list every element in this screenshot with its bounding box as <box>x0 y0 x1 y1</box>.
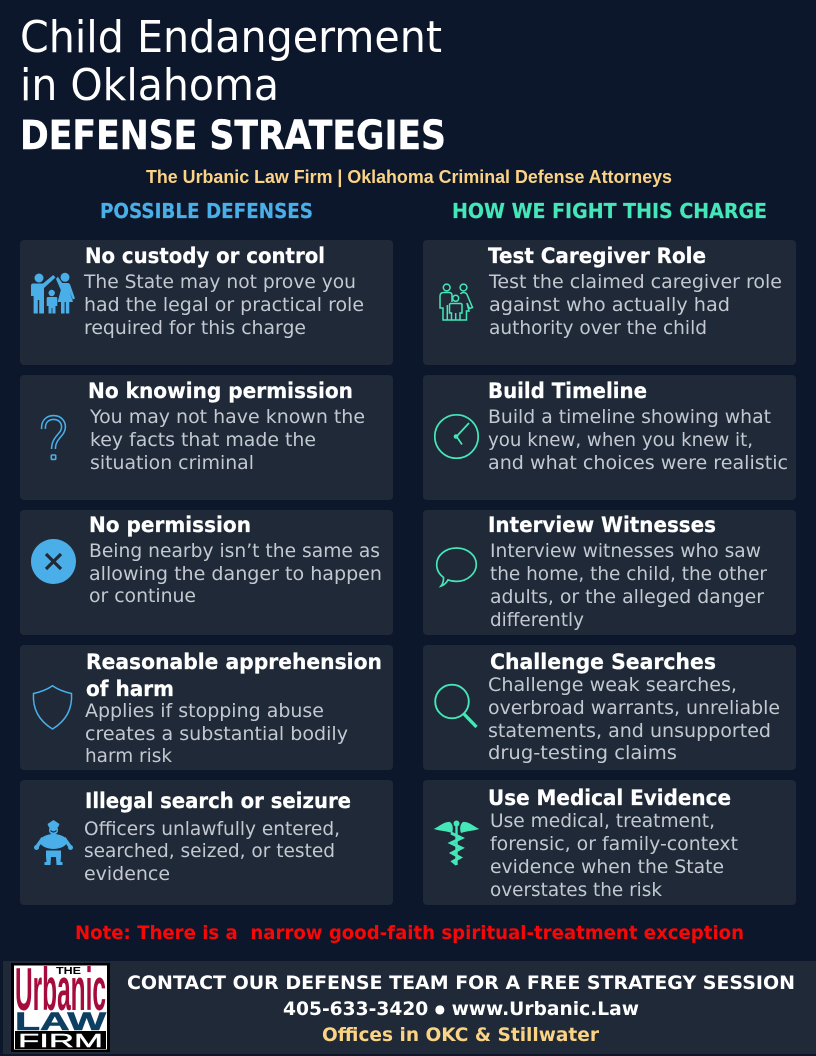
text block: allowing the danger to happen <box>89 564 382 585</box>
heading: No custody or control <box>85 244 325 269</box>
text block: or continue <box>89 586 196 607</box>
subtitle: firm name: The Urbanic Law Firm | Oklahoma Criminal Defense Attorneys <box>146 166 672 187</box>
text block: and what choices were realistic <box>488 453 788 474</box>
logo: THE <box>56 966 81 977</box>
text block <box>488 407 788 474</box>
text block: Build a timeline showing what <box>488 407 771 428</box>
text block: had the legal or practical role <box>84 295 364 316</box>
title: DEFENSE STRATEGIES <box>20 113 446 159</box>
text block: evidence <box>84 864 170 885</box>
text block: harm risk <box>85 746 172 767</box>
heading: how we fight this charge: HOW WE FIGHT THIS CHARGE <box>452 199 767 223</box>
text block: Test the claimed caregiver role <box>488 272 782 293</box>
panel: build timeline <box>423 375 796 500</box>
panel: interview witnesses <box>423 510 796 635</box>
text block <box>89 407 365 474</box>
panel: illegal search or seizure <box>20 780 393 905</box>
title <box>20 12 446 159</box>
text block: The State may not prove you <box>83 272 356 293</box>
text block: differently <box>490 610 584 631</box>
heading: Challenge Searches <box>490 650 716 675</box>
text block: Applies if stopping abuse <box>85 701 324 722</box>
text block: overstates the risk <box>490 880 662 901</box>
panel: no custody or control <box>20 240 393 365</box>
phone and website: www.Urbanic.Law <box>445 998 639 1020</box>
logo: FIRM <box>18 1030 103 1051</box>
text block: Being nearby isn’t the same as <box>89 541 380 562</box>
icon: caduceus <box>434 820 479 865</box>
heading: Test Caregiver Role <box>488 244 706 269</box>
offices: Offices in OKC & Stillwater <box>322 1024 600 1046</box>
heading: Reasonable apprehension <box>86 650 382 675</box>
icon: x in circle <box>31 539 76 584</box>
text block: the home, the child, the other <box>490 564 767 585</box>
text block: You may not have known the <box>89 407 365 428</box>
text block <box>85 701 348 767</box>
heading: Use Medical Evidence <box>488 786 731 811</box>
text block: against who actually had <box>489 295 730 316</box>
icon: clock <box>435 415 478 458</box>
panel: use medical evidence <box>423 780 796 905</box>
text block <box>490 541 767 631</box>
phone and website: ● <box>435 1002 445 1016</box>
text block: forensic, or family-context <box>490 834 738 855</box>
text block: required for this charge <box>84 318 306 339</box>
text block: situation criminal <box>90 453 254 474</box>
text block: Use medical, treatment, <box>490 811 715 832</box>
logo <box>11 956 110 1052</box>
text block: you knew, when you knew it, <box>488 430 753 451</box>
panel: no permission <box>20 510 393 635</box>
panel: reasonable apprehension of harm <box>20 645 393 770</box>
logo: LAW <box>15 1008 107 1036</box>
text block: key facts that made the <box>90 430 316 451</box>
text block: evidence when the State <box>490 857 724 878</box>
text block: creates a substantial bodily <box>85 724 348 745</box>
text block: drug-testing claims <box>488 743 677 764</box>
text block <box>89 541 382 607</box>
icon: police officer <box>34 820 73 865</box>
text block <box>490 811 738 901</box>
contact heading: CONTACT OUR DEFENSE TEAM FOR A FREE STRATEGY SESSION <box>127 972 795 994</box>
heading <box>86 650 382 702</box>
text block <box>488 272 782 339</box>
icon: family outline <box>440 284 472 320</box>
text block: searched, seized, or tested <box>84 841 335 862</box>
footer banner <box>3 956 816 1054</box>
text block: adults, or the alleged danger <box>490 587 764 608</box>
icon: question mark <box>43 418 64 459</box>
footer banner: Urbanic <box>15 956 106 1023</box>
icon: magnifying glass <box>435 685 476 727</box>
heading: of harm <box>86 677 174 702</box>
text block: statements, and unsupported <box>488 721 771 742</box>
panel: test caregiver role <box>423 240 796 365</box>
heading: No knowing permission <box>88 379 353 404</box>
text block: Officers unlawfully entered, <box>84 819 340 840</box>
heading: Interview Witnesses <box>488 513 716 538</box>
heading: No permission <box>89 513 251 538</box>
heading: Build Timeline <box>488 379 647 404</box>
title: in Oklahoma <box>20 60 279 111</box>
text block <box>488 675 780 764</box>
icon: family with raised arms <box>31 273 75 314</box>
panel: challenge searches <box>423 645 796 770</box>
text block: Interview witnesses who saw <box>490 541 761 562</box>
text block: Challenge weak searches, <box>488 675 737 696</box>
text block <box>83 272 364 339</box>
title: Child Endangerment <box>20 12 442 63</box>
phone and website: 405-633-3420 <box>283 998 431 1020</box>
note: Note: There is a narrow good-faith spiritual-treatment exception <box>75 922 744 944</box>
icon: shield <box>33 686 72 729</box>
text block: overbroad warrants, unreliable <box>488 698 780 719</box>
heading: Illegal search or seizure <box>85 789 351 814</box>
text block: authority over the child <box>489 318 707 339</box>
icon: speech bubble <box>437 548 476 586</box>
heading: possible defenses: POSSIBLE DEFENSES <box>100 199 313 223</box>
panel: no knowing permission <box>20 375 393 500</box>
text block <box>84 819 340 885</box>
